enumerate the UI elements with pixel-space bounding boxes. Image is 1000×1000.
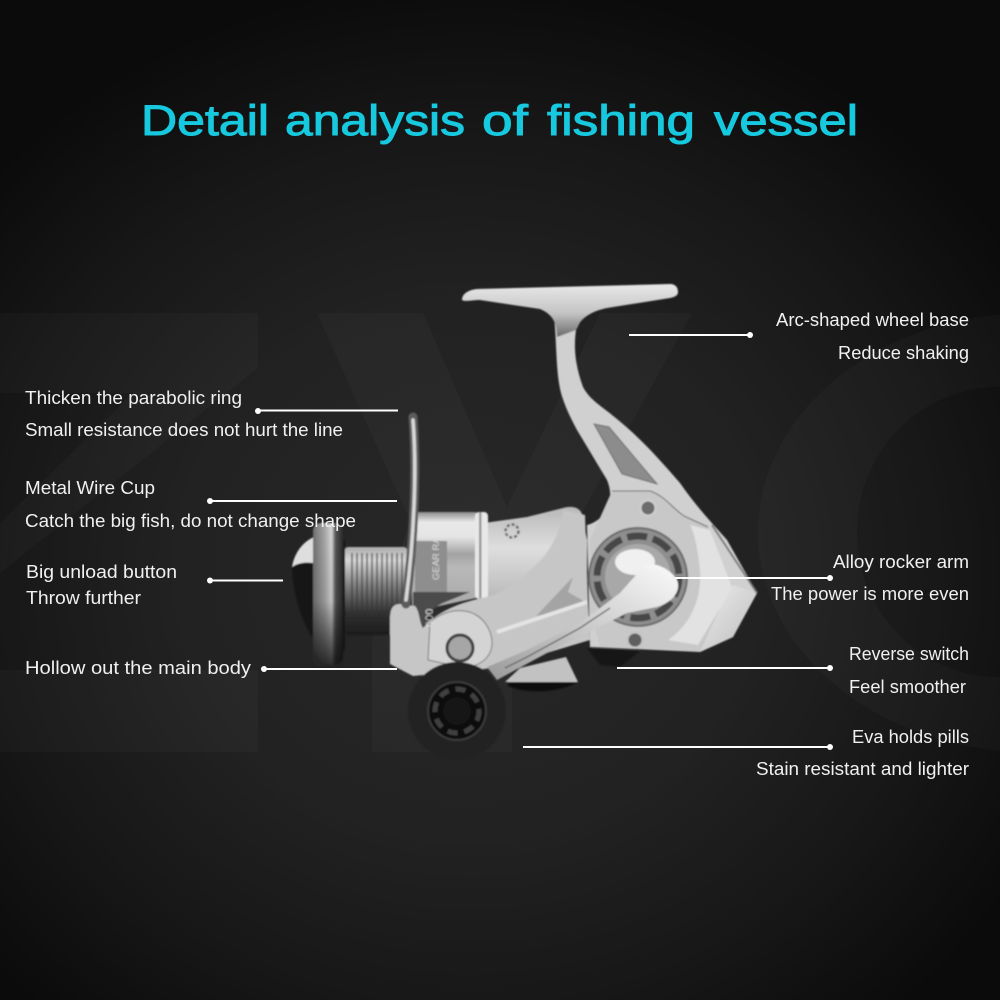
callout: metal wire cup	[25, 477, 397, 531]
title	[141, 97, 858, 145]
reel: rotor arm	[390, 510, 590, 676]
callout: arc-shaped wheel base: Reduce shaking	[838, 342, 969, 363]
reel: main spool: GEAR RA	[431, 537, 442, 580]
callout: hollow main body	[25, 657, 397, 678]
reel: bottom foot shade	[505, 657, 578, 691]
callout: metal wire cup: Metal Wire Cup	[25, 477, 155, 498]
title: of	[482, 97, 529, 145]
reel: stem window	[594, 424, 657, 484]
callout: eva knob	[523, 726, 969, 779]
callout: parabolic ring: Small resistance does not hurt the line	[25, 419, 343, 440]
callout: arc-shaped wheel base	[629, 309, 969, 363]
reel: EVA knob	[408, 662, 506, 760]
reel: stem and foot	[462, 284, 757, 652]
callout: parabolic ring: Thicken the parabolic ring	[25, 387, 242, 408]
callout: parabolic ring	[25, 387, 398, 440]
callout: alloy rocker arm: Alloy rocker arm	[833, 551, 969, 572]
reel: body logo	[506, 524, 518, 538]
title: vessel	[714, 97, 858, 145]
callout: eva knob: Stain resistant and lighter	[756, 758, 969, 779]
reel: gear ring	[589, 528, 687, 626]
reel: upper screw	[640, 500, 656, 516]
reel: front cap and flange	[292, 523, 345, 665]
callout: reverse switch: Reverse switch	[849, 643, 969, 664]
reel: side body	[484, 507, 587, 625]
callout: unload button: Big unload button	[26, 561, 177, 582]
reel: lower screw	[628, 632, 642, 648]
callout: unload button	[26, 561, 283, 608]
watermark letters	[0, 313, 1000, 752]
callout: unload button: Throw further	[26, 587, 141, 608]
callout: alloy rocker arm	[675, 551, 969, 604]
reel: reverse switch	[587, 648, 640, 667]
callout: metal wire cup: Catch the big fish, do not change shape	[25, 510, 356, 531]
callout: arc-shaped wheel base: Arc-shaped wheel base	[776, 309, 969, 330]
title: fishing	[547, 97, 695, 145]
callout: hollow main body: Hollow out the main body	[25, 657, 252, 678]
reel: handle arm	[487, 564, 678, 680]
callout: alloy rocker arm: The power is more even	[771, 583, 969, 604]
callout: eva knob: Eva holds pills	[852, 726, 969, 747]
callout: reverse switch	[617, 643, 969, 697]
reel: rotor screw	[447, 635, 473, 661]
reel: bail wire	[406, 417, 415, 604]
reel: spool size number: 000	[424, 609, 436, 627]
reel: body bands	[590, 491, 757, 652]
title: analysis	[285, 97, 465, 145]
title: Detail	[141, 97, 269, 145]
reel: main spool	[412, 512, 488, 630]
fishing reel	[292, 284, 757, 760]
callout: reverse switch: Feel smoother	[849, 676, 966, 697]
reel: threaded line spool	[345, 547, 407, 635]
